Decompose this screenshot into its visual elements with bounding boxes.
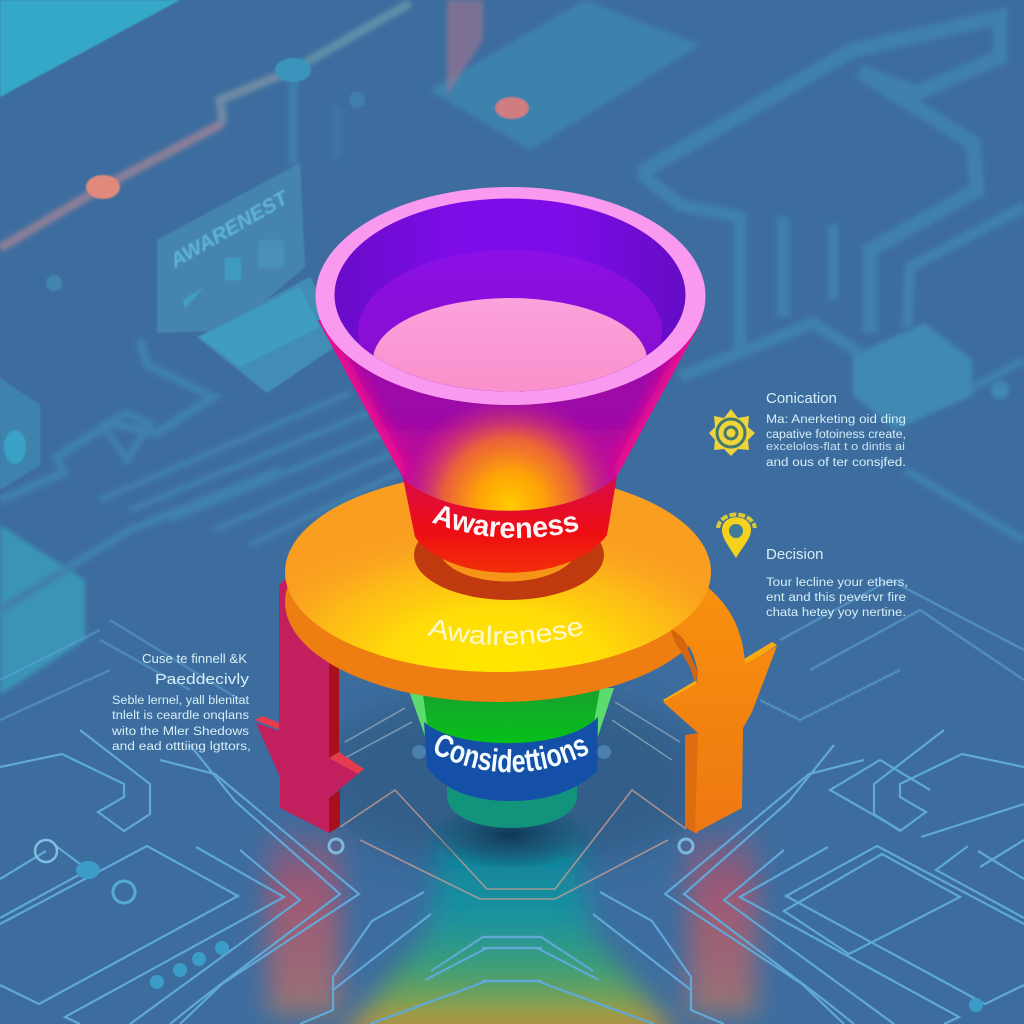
label: Awareness on disc: Awalrenese (427, 620, 583, 646)
label: Considerations: Considettions (434, 735, 588, 772)
icon: sun target (709, 409, 755, 456)
icon: map pin (718, 514, 755, 558)
light green side strips (408, 688, 614, 745)
callout: Decision: chata hetey yoy nertine. (766, 607, 906, 619)
callout: Decision: Decision (766, 546, 824, 563)
arrow: orange right arrow (663, 585, 777, 833)
callout: Paeddecivly: and ead otttiing lgttors, (112, 741, 251, 753)
arrow: magenta left arrow (255, 572, 364, 833)
callout: Decision: ent and this pevervr fire (766, 592, 906, 604)
cone body (318, 320, 702, 511)
inner curve face (670, 628, 698, 683)
funnel lower stage: green, blue, teal (410, 688, 614, 828)
callout: Paeddecivly: Cuse te finnell &K (142, 652, 248, 666)
disc rim (285, 502, 711, 702)
shadow ring on disc (414, 510, 604, 600)
teal base (447, 780, 577, 828)
laptop (157, 163, 345, 393)
callout: Conication: capative fotoiness create, (766, 429, 906, 441)
callout: Paeddecivly: wito the Mler Shedows (111, 726, 249, 738)
red band (403, 476, 617, 573)
callout: Conication (709, 390, 906, 469)
left box with oval (0, 378, 40, 490)
callout: Conication: Conication (766, 390, 837, 407)
funnel rim (316, 187, 706, 405)
callout: Conication: excelolos-flat t o dintis ai (766, 441, 905, 453)
pink and orange reflections (268, 830, 756, 1015)
right processor block (853, 323, 972, 430)
pink bars on upper panel (447, 0, 483, 95)
upper panel (430, 0, 700, 150)
funnel interior (334, 198, 686, 392)
callout: Conication: and ous of ter consjfed. (766, 457, 906, 469)
left stack block (0, 525, 85, 695)
faint label on background laptop: AWARENEST (166, 186, 293, 273)
small orange bowl (438, 550, 578, 582)
label: Awareness on band: Awareness (432, 506, 578, 538)
arrow side face (329, 600, 340, 833)
callout: Conication: Ma: Anerketing oid ding (766, 414, 906, 426)
green section (422, 688, 600, 745)
callout: Decision (718, 514, 908, 619)
teal corner panel (0, 0, 180, 97)
callout: Paeddecivly: Paeddecivly (155, 671, 250, 688)
callout: Decision: Tour lecline your ethers, (766, 577, 908, 589)
salmon trace (0, 3, 410, 248)
circuit lines (0, 580, 1024, 1024)
blue band (424, 717, 598, 801)
funnel middle stage: orange and yellow disc top (285, 482, 711, 672)
funnel upper stage: purple cone (316, 187, 706, 582)
central colour reflection (340, 835, 680, 1024)
blurred traces upper half (0, 17, 1024, 610)
callout: Paeddecivly: Seble lernel, yall blenitat (112, 695, 250, 707)
callout: Paeddecivly (111, 652, 251, 753)
floor darkening (312, 690, 712, 870)
funnel liquid (358, 250, 662, 392)
shadow under funnel (428, 801, 592, 869)
callout: Paeddecivly: tnlelt is ceardle onqlans (112, 710, 249, 722)
